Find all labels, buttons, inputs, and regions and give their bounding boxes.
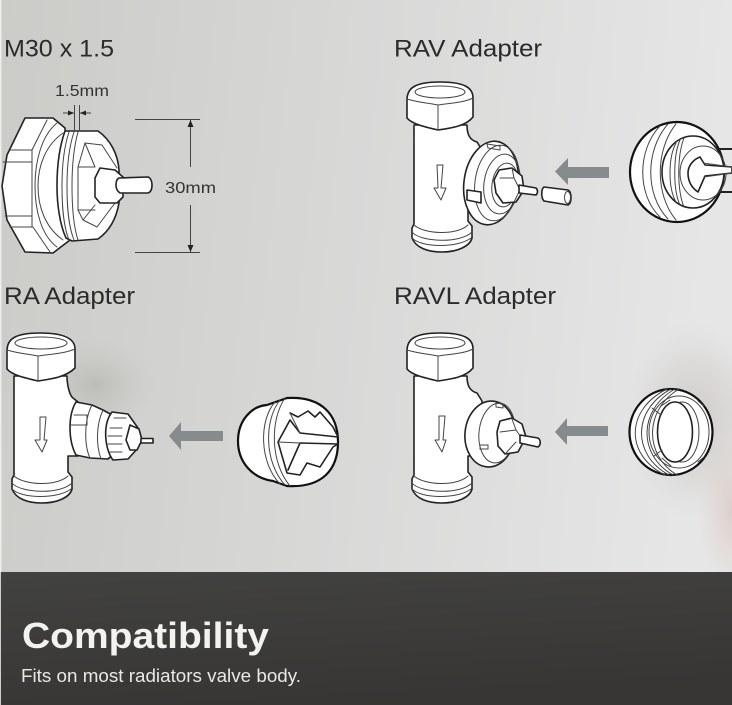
sleeve (542, 187, 571, 205)
right side strips (712, 149, 732, 192)
nut and pin (497, 418, 526, 454)
flange hex nut (2, 118, 70, 253)
valve top nut (7, 333, 75, 381)
threaded collar (57, 131, 119, 241)
diagram: M30 x 1.5 fitting (2, 118, 152, 253)
heading: RA Adapter: RA Adapter (4, 283, 135, 310)
knurled head (106, 412, 138, 460)
nut and pin (494, 168, 524, 203)
caption text: Fits on most radiators valve body. (21, 666, 301, 686)
caption heading: Compatibility (22, 615, 269, 656)
threaded ring (630, 389, 712, 475)
panel: caption band (1, 572, 732, 705)
inner ring (649, 396, 709, 468)
diagram: RAV valve body (407, 82, 571, 252)
valve body (412, 376, 482, 503)
diagram: RAVL adapter (630, 389, 712, 475)
valve head (458, 138, 524, 228)
small hex nut (78, 143, 117, 227)
arrow (555, 418, 608, 445)
heading: M30 x 1.5: M30 x 1.5 (4, 36, 114, 62)
arrow (555, 158, 609, 185)
ring notches (652, 400, 704, 466)
valve top nut (407, 82, 473, 130)
cross socket (278, 411, 338, 475)
flow arrow (35, 417, 47, 452)
neck hex (95, 168, 123, 203)
heading: RAVL Adapter: RAVL Adapter (394, 283, 556, 310)
flow arrow (435, 416, 446, 452)
valve head (462, 399, 518, 469)
heading: RAV Adapter: RAV Adapter (394, 36, 542, 62)
diagram: RAV adapter (630, 122, 732, 222)
dimension: 1.5mm pitch: 1.5mm (55, 83, 109, 100)
threaded insert (662, 136, 724, 208)
diagram: RAVL valve body (407, 333, 540, 503)
diagram: RA valve body (7, 333, 153, 503)
valve top nut (407, 333, 473, 381)
shell rings (643, 124, 676, 220)
dimension: 1.5mm pitch (55, 83, 109, 130)
pin (116, 177, 152, 193)
valve neck (70, 402, 118, 459)
arrow (169, 422, 223, 450)
threads (264, 398, 290, 486)
dimension: 30mm: 30mm (165, 180, 216, 197)
flow arrow (434, 165, 446, 200)
dimension: 30mm (135, 120, 216, 252)
valve body (412, 125, 482, 252)
shell (238, 398, 338, 486)
socket and slot (688, 157, 732, 192)
valve body (12, 376, 78, 503)
hex and pin (126, 425, 142, 450)
outer shell (630, 122, 724, 222)
diagram: RA adapter (238, 398, 338, 486)
